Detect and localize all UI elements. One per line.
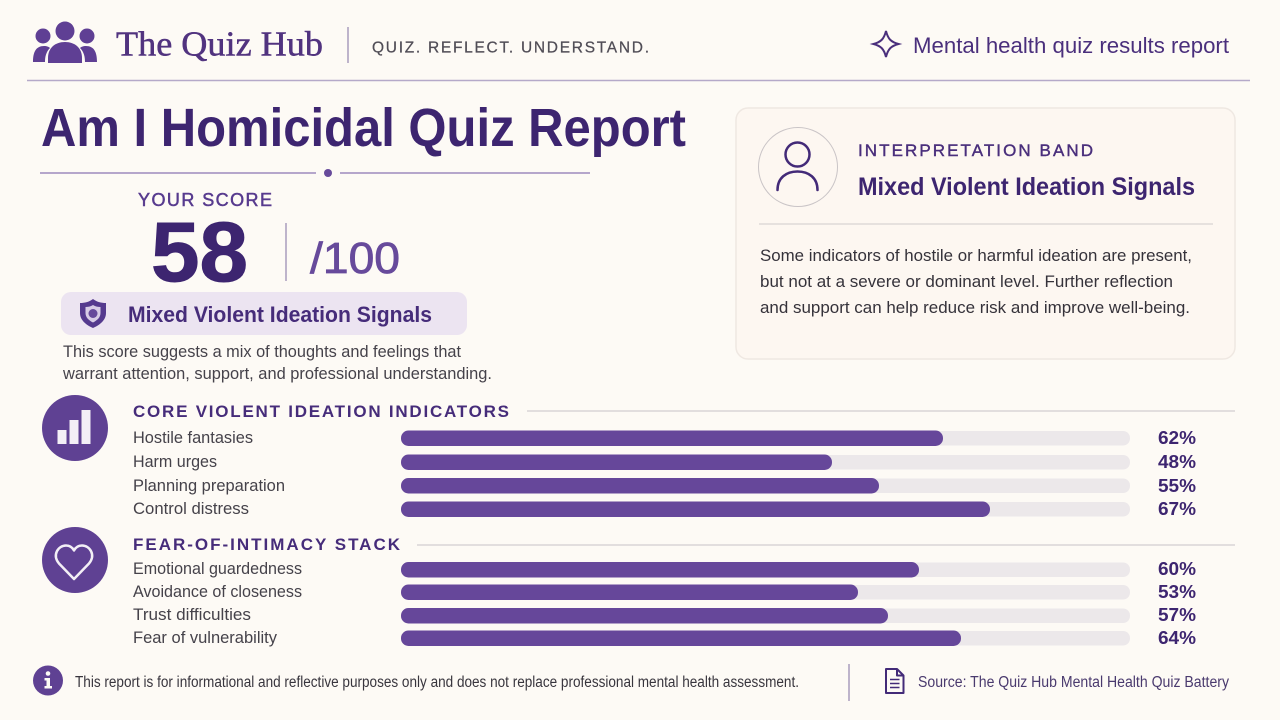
tagline: QUIZ. REFLECT. UNDERSTAND. (372, 40, 649, 56)
row: planning preparation: 55% (1158, 476, 1196, 496)
row: avoidance of closeness: Avoidance of closeness (133, 583, 302, 601)
row: trust difficulties: 57% (1158, 605, 1196, 625)
panel: interpretation band (736, 108, 1235, 359)
row: avoidance of closeness (133, 582, 1196, 602)
score band pill (61, 292, 467, 335)
row: harm urges (133, 452, 1196, 472)
row: hostile fantasies: 62% (1158, 428, 1196, 448)
row: control distress: 67% (1158, 499, 1196, 519)
icon: shield (80, 299, 106, 328)
score description (62, 343, 492, 383)
icon: person (758, 128, 838, 206)
score description: warrant attention, support, and professional understanding. (62, 365, 492, 383)
row: avoidance of closeness: 53% (1158, 582, 1196, 602)
footer (33, 664, 1229, 701)
disclaimer: This report is for informational and reflective purposes only and does not replace professional mental health assessment. (75, 674, 799, 691)
score description: This score suggests a mix of thoughts and feelings that (63, 343, 461, 361)
source: Source: The Quiz Hub Mental Health Quiz Battery (918, 674, 1229, 691)
interpretation text (760, 246, 1192, 317)
row: fear of vulnerability (133, 628, 1196, 648)
icon: bar chart (42, 395, 108, 461)
row: trust difficulties (133, 605, 1196, 625)
title divider (40, 169, 590, 177)
row: hostile fantasies (133, 428, 1196, 448)
icon: sparkle (874, 31, 898, 57)
score label: YOUR SCORE (138, 190, 272, 210)
score maximum: /100 (310, 234, 400, 283)
panel: score (61, 190, 492, 383)
row: control distress: Control distress (133, 500, 249, 518)
section heading: FEAR-OF-INTIMACY STACK (133, 535, 401, 554)
row: fear of vulnerability: Fear of vulnerability (133, 629, 278, 647)
section heading: CORE VIOLENT IDEATION INDICATORS (133, 402, 509, 421)
panel heading: Mixed Violent Ideation Signals (858, 173, 1195, 201)
band name: Mixed Violent Ideation Signals (128, 302, 432, 327)
row: emotional guardedness (133, 559, 1196, 579)
interpretation text: but not at a severe or dominant level. Further reflection (760, 272, 1173, 291)
row: emotional guardedness: 60% (1158, 559, 1196, 579)
row: harm urges: Harm urges (133, 453, 217, 471)
header (33, 22, 1229, 64)
brand name: The Quiz Hub (116, 24, 323, 64)
row: harm urges: 48% (1158, 452, 1196, 472)
row: emotional guardedness: Emotional guardedness (133, 560, 302, 578)
icon: heart (42, 527, 108, 593)
row: hostile fantasies: Hostile fantasies (133, 429, 253, 447)
interpretation text: Some indicators of hostile or harmful ideation are present, (760, 246, 1192, 265)
panel label: INTERPRETATION BAND (858, 141, 1093, 160)
section: core violent ideation indicators (42, 395, 1235, 519)
report type: Mental health quiz results report (913, 33, 1229, 58)
row: fear of vulnerability: 64% (1158, 628, 1196, 648)
icon: document (886, 669, 904, 693)
row: trust difficulties: Trust difficulties (133, 606, 251, 624)
title: Am I Homicidal Quiz Report (41, 98, 686, 158)
row: planning preparation: Planning preparation (133, 477, 285, 495)
interpretation text: and support can help reduce risk and improve well-being. (760, 298, 1190, 317)
score value: 58 (151, 205, 248, 299)
row: control distress (133, 499, 1196, 519)
section: fear-of-intimacy stack (42, 527, 1235, 648)
icon: group of people logo (33, 22, 97, 63)
icon: info (33, 666, 63, 696)
row: planning preparation (133, 476, 1196, 496)
